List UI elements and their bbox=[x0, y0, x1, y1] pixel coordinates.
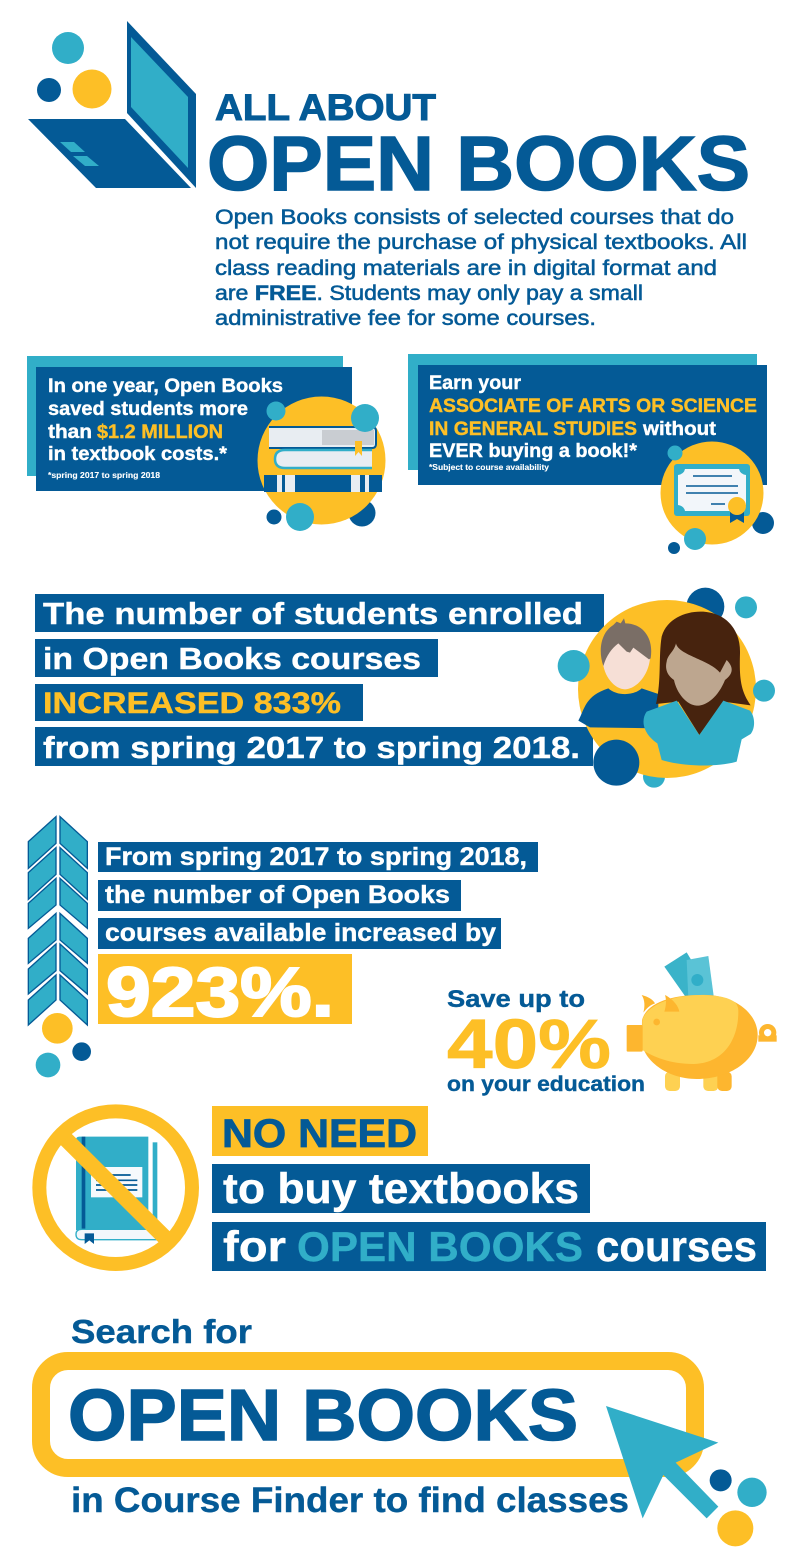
text block: introduction: class reading materials are in digital format and bbox=[215, 257, 717, 280]
panel: courses statistic: From spring 2017 to spring 2018, bbox=[105, 843, 527, 871]
panel: savings bbox=[27, 356, 386, 531]
panel: enrollment statistic bbox=[35, 594, 604, 766]
icon: cursor with dots bbox=[606, 1406, 767, 1546]
savings text: $1.2 MILLION bbox=[97, 422, 223, 443]
panel: enrollment statistic: The number of students enrolled bbox=[43, 596, 583, 631]
text block: save up to 40%: Save up to bbox=[447, 986, 585, 1013]
savings text: saved students more bbox=[48, 399, 248, 420]
text block: introduction: Open Books consists of selected courses that do bbox=[215, 206, 734, 229]
search term: OPEN BOOKS bbox=[68, 1376, 578, 1456]
caption: course finder: in Course Finder to find classes bbox=[71, 1481, 629, 1520]
icon: no textbook bbox=[39, 1111, 192, 1264]
savings text: than bbox=[48, 422, 92, 443]
degree text: EVER buying a book!* bbox=[429, 441, 638, 462]
panel: enrollment statistic: INCREASED 833% bbox=[43, 687, 341, 720]
degree text bbox=[429, 373, 757, 472]
panel: enrollment statistic: in Open Books courses bbox=[43, 641, 421, 676]
search box bbox=[41, 1361, 695, 1468]
icon: diploma bbox=[660, 442, 774, 554]
panel: no need to buy textbooks: NO NEED bbox=[222, 1112, 417, 1156]
panel: no need to buy textbooks: to buy textbooks bbox=[223, 1165, 579, 1213]
panel: courses statistic: the number of Open Books bbox=[105, 881, 450, 909]
text block: save up to 40%: 40% bbox=[447, 1005, 611, 1083]
panel: courses statistic: courses available increased by bbox=[105, 919, 496, 947]
panel: no need to buy textbooks: courses bbox=[596, 1223, 757, 1271]
text block: introduction: not require the purchase of physical textbooks. All bbox=[215, 231, 747, 254]
panel: degree bbox=[408, 354, 774, 554]
icon: students bbox=[558, 588, 775, 788]
savings text: in textbook costs.* bbox=[48, 444, 228, 465]
heading: search for: Search for bbox=[71, 1313, 252, 1350]
icon: stack of books bbox=[258, 396, 386, 531]
title: OPEN BOOKS bbox=[207, 121, 750, 207]
panel: courses statistic bbox=[98, 842, 538, 1031]
title bbox=[207, 87, 750, 207]
degree text: IN GENERAL STUDIES bbox=[429, 419, 637, 440]
degree text: ASSOCIATE OF ARTS OR SCIENCE bbox=[429, 396, 757, 417]
panel: no need to buy textbooks bbox=[212, 1106, 766, 1271]
degree text: without bbox=[642, 419, 717, 440]
panel: courses statistic: 923%. bbox=[106, 953, 334, 1031]
panel: search call to action bbox=[41, 1313, 695, 1520]
degree text: Earn your bbox=[429, 373, 522, 394]
savings text: *spring 2017 to spring 2018 bbox=[48, 471, 161, 480]
text block: introduction: are FREE . Students may only pay a small bbox=[215, 282, 643, 305]
degree text: *Subject to course availability bbox=[429, 463, 550, 472]
text block: save up to 40% bbox=[447, 986, 645, 1096]
icon: open laptop logo bbox=[28, 21, 196, 188]
panel: no need to buy textbooks: for bbox=[223, 1223, 286, 1271]
title: ALL ABOUT bbox=[215, 87, 436, 128]
panel: enrollment statistic: from spring 2017 to spring 2018. bbox=[43, 730, 580, 765]
text block: save up to 40%: on your education bbox=[447, 1073, 645, 1096]
text block: introduction: administrative fee for some courses. bbox=[215, 307, 596, 330]
text block: introduction bbox=[215, 206, 747, 330]
icon: piggy bank bbox=[627, 952, 777, 1091]
icon: upward chevrons bbox=[28, 817, 91, 1077]
savings text bbox=[48, 376, 283, 480]
savings text: In one year, Open Books bbox=[48, 376, 283, 397]
panel: no need to buy textbooks: OPEN BOOKS bbox=[297, 1223, 583, 1270]
